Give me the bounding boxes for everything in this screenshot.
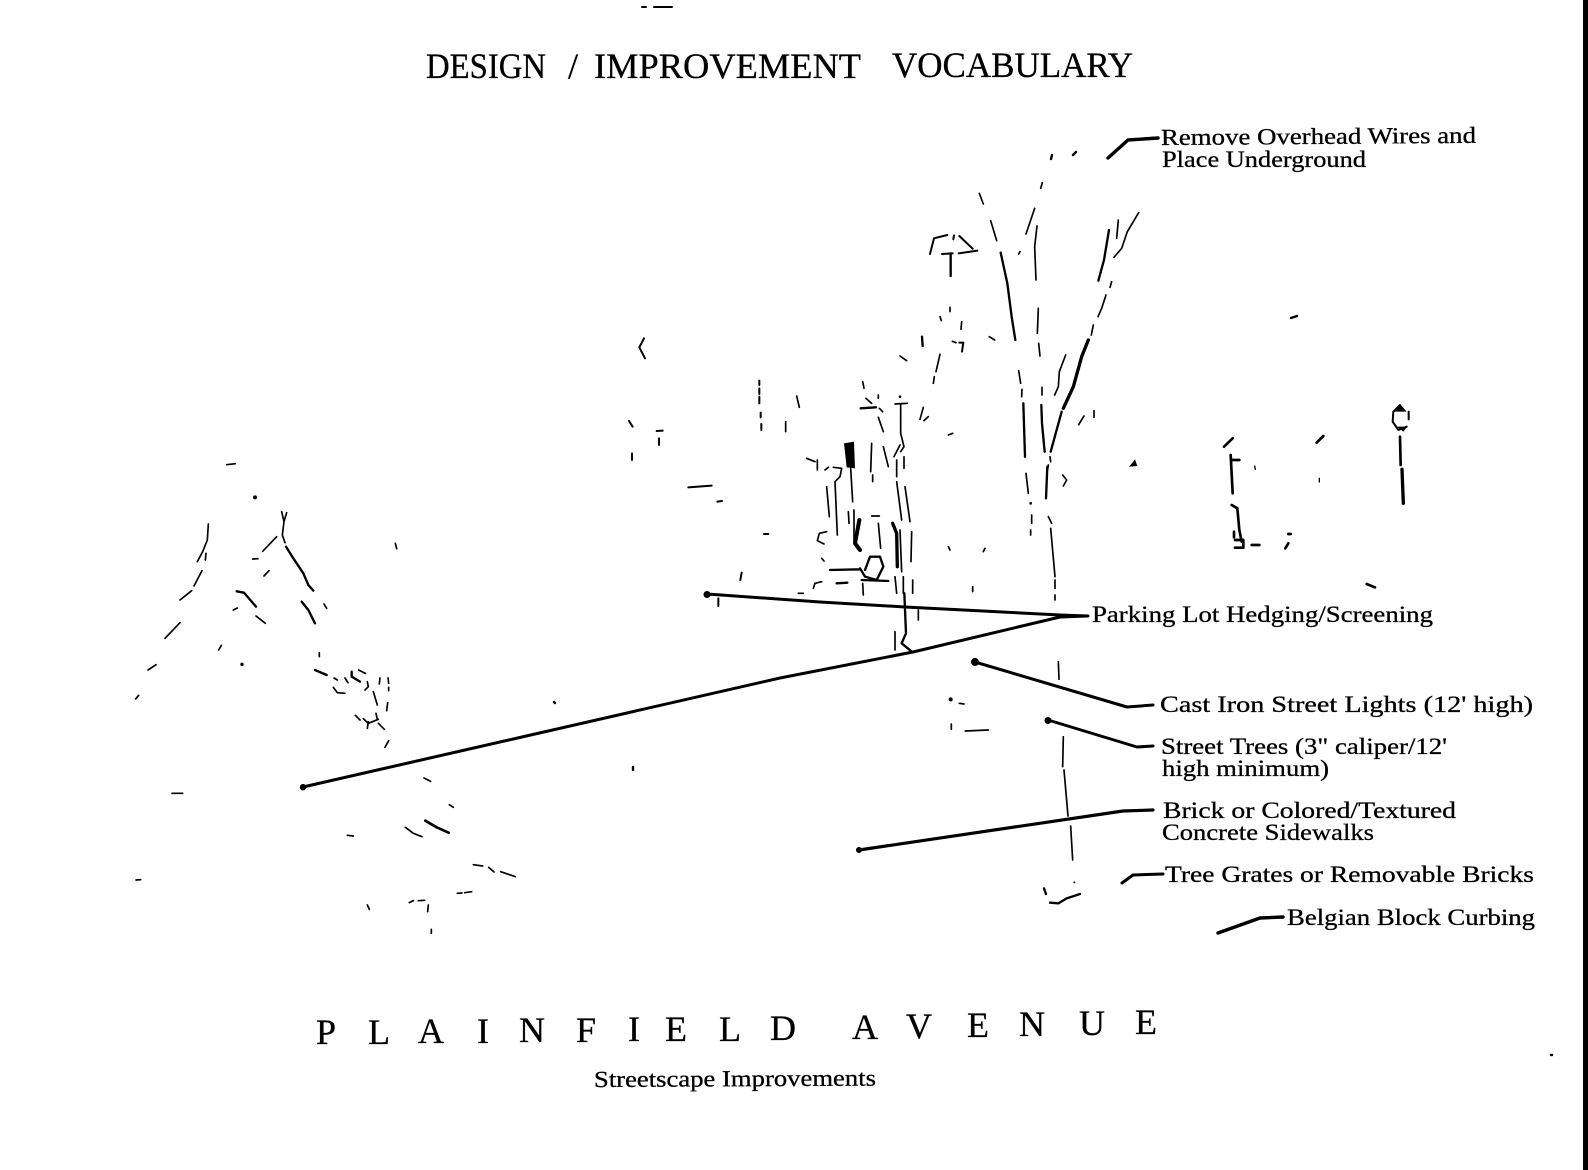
streetscape sketch [136, 152, 1552, 1055]
title: IMPROVEMENT [594, 46, 861, 86]
label: sidewalks [1162, 798, 1457, 845]
label: cast iron street lights: Cast Iron Street Lights (12' high) [1160, 692, 1533, 717]
label: remove overhead wires: Place Underground [1162, 147, 1367, 172]
leader: parking lot hedging [303, 594, 1088, 787]
sketch: large tree and pedestrian lamp [900, 183, 1139, 469]
leader: curbing [1218, 917, 1283, 933]
sketch: isolated specks [554, 152, 1552, 1055]
plainfield avenue heading: PLAINFIELD AVENUE [316, 1002, 1157, 1052]
leader end dots [300, 591, 1052, 853]
label: street trees: Street Trees (3" caliper/12' [1161, 734, 1447, 759]
title: DESIGN [426, 46, 546, 86]
title [426, 45, 1133, 86]
label: belgian block curbing: Belgian Block Curbing [1287, 905, 1536, 930]
label: remove overhead wires [1161, 123, 1477, 172]
label: sidewalks: Concrete Sidewalks [1162, 820, 1374, 845]
leader lines [300, 138, 1283, 933]
label: street trees: high minimum) [1162, 756, 1329, 781]
sketch: midground strokes [629, 338, 768, 606]
leader: street lights [975, 662, 1153, 707]
title: VOCABULARY [892, 45, 1133, 85]
scan marks at top [642, 6, 672, 8]
sketch: foreground tree at left [136, 464, 397, 747]
label: street trees [1161, 734, 1447, 781]
sketch: distant street lamp and post [1224, 404, 1409, 587]
leader: sidewalks [859, 810, 1153, 850]
leader: overhead wires [1108, 138, 1158, 158]
sketch: street tree trunk and grate [949, 662, 1080, 903]
label: tree grates: Tree Grates or Removable Bricks [1165, 862, 1534, 887]
title: / [568, 46, 578, 86]
scan edge strip [1583, 0, 1588, 1170]
label: sidewalks: Brick or Colored/Textured [1163, 798, 1457, 823]
label: remove overhead wires: Remove Overhead Wires and [1161, 123, 1477, 150]
subtitle: Streetscape Improvements [594, 1066, 876, 1092]
leader: street trees [1048, 720, 1153, 747]
label: parking lot hedging: Parking Lot Hedging/Screening [1092, 602, 1434, 627]
callout labels [1092, 123, 1536, 930]
sketch: foreground ground strokes [136, 778, 515, 933]
sketch: background trees and building [786, 382, 1067, 652]
leader: tree grates [1122, 874, 1163, 883]
